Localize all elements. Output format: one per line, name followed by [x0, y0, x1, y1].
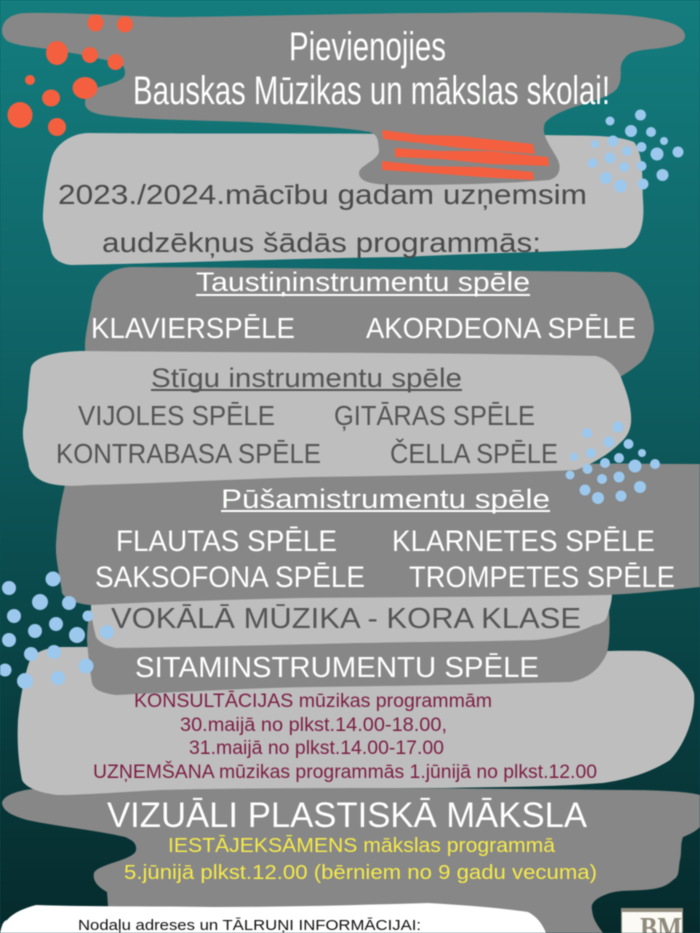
panel: wind instruments grey blob	[56, 464, 700, 605]
wind programme list	[95, 525, 675, 594]
title	[133, 25, 610, 113]
panel: string instruments light blob	[23, 351, 631, 486]
consultation and admission dates: UZŅEMŠANA mūzikas programmās 1.jūnijā no plkst.12.00	[93, 761, 597, 783]
wind programme list: TROMPETES SPĒLE	[409, 561, 675, 594]
icon: blue dots top right	[588, 110, 684, 192]
heading: keyboard instruments: Taustiņinstrumentu spēle	[196, 267, 530, 297]
title: Pievienojies	[289, 25, 446, 69]
keyboard programme list: AKORDEONA SPĒLE	[366, 313, 636, 345]
vocal programme: VOKĀLĀ MŪZIKA - KORA KLASE	[111, 603, 581, 635]
string programme list	[56, 400, 558, 469]
consultation and admission dates	[93, 691, 597, 783]
string programme list: KONTRABASA SPĒLE	[56, 438, 321, 469]
keyboard programme list	[91, 313, 636, 345]
art exam details: 5.jūnijā plkst.12.00 (bērniem no 9 gadu vecuma)	[124, 862, 597, 884]
string programme list: ĢITĀRAS SPĒLE	[334, 400, 535, 431]
wind programme list: SAKSOFONA SPĒLE	[95, 561, 365, 594]
panel: contact white blob	[0, 903, 546, 933]
icon: blue dots middle right	[566, 422, 660, 504]
string programme list: ČELLA SPĒLE	[390, 438, 558, 469]
art exam details: IESTĀJEKSĀMENS mākslas programmā	[168, 834, 556, 857]
icon: blue dots lower left	[0, 572, 114, 689]
panel: title grey blob	[2, 12, 685, 185]
icon: orange stripes	[382, 130, 549, 180]
consultation and admission dates: 30.maijā no plkst.14.00-18.00,	[180, 715, 447, 736]
intro text	[58, 179, 587, 258]
logo	[621, 908, 683, 933]
panel: consultation light blob	[18, 647, 694, 795]
heading: wind instruments: Pūšamistrumentu spēle	[221, 484, 550, 514]
panel: keyboard instruments grey blob	[85, 267, 654, 377]
panel: percussion grey blob	[87, 610, 610, 695]
icon: orange dots	[8, 14, 133, 136]
wind programme list: KLARNETES SPĒLE	[392, 525, 655, 558]
keyboard programme list: KLAVIERSPĒLE	[91, 313, 295, 345]
heading: string instruments: Stīgu instrumentu spēle	[151, 363, 462, 393]
consultation and admission dates: 31.maijā no plkst.14.00-17.00	[189, 738, 444, 759]
intro text: 2023./2024.mācību gadam uzņemsim	[58, 179, 587, 210]
string programme list: VIJOLES SPĒLE	[78, 400, 275, 431]
art exam details	[124, 834, 597, 884]
intro text: audzēkņus šādās programmās:	[102, 227, 541, 258]
percussion programme: SITAMINSTRUMENTU SPĒLE	[135, 652, 539, 684]
heading: visual art: VIZUĀLI PLASTISKĀ MĀKSLA	[107, 796, 588, 835]
panel: intro light blob	[43, 133, 643, 265]
panel: visual art grey blob	[2, 787, 700, 933]
panel: vocal light blob	[91, 593, 612, 648]
consultation and admission dates: KONSULTĀCIJAS mūzikas programmām	[134, 691, 492, 712]
wind programme list: FLAUTAS SPĒLE	[116, 525, 337, 558]
